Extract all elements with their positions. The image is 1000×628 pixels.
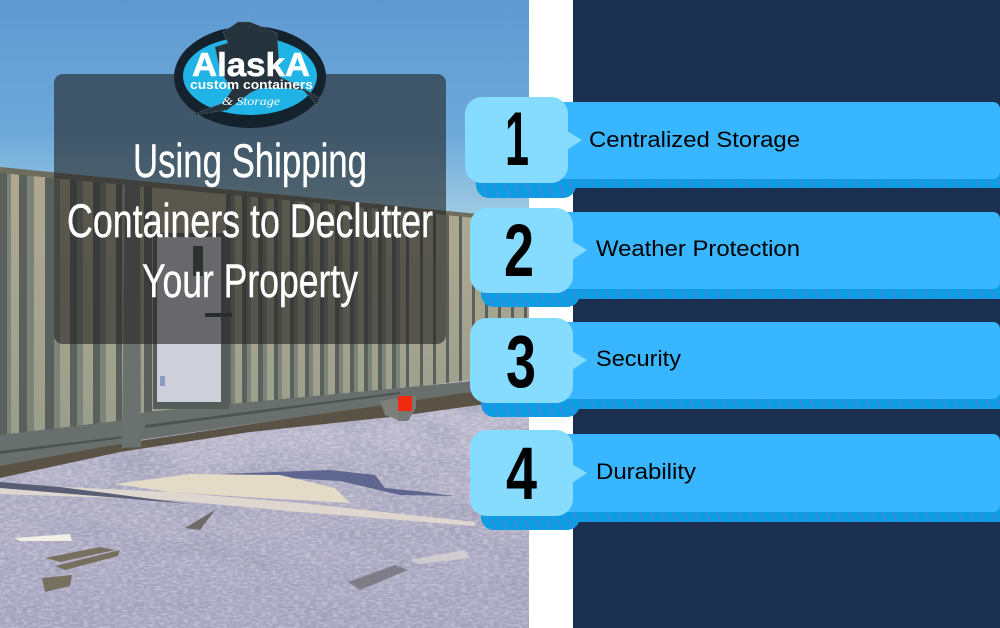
item 2: Weather Protection: 2 — [504, 209, 534, 292]
red box — [398, 396, 412, 411]
logo: Alaska Custom Containers: custom containers — [190, 78, 313, 92]
container corner post — [122, 180, 141, 448]
title: Containers to Declutter — [67, 194, 433, 247]
item 4: Durability: Durability — [596, 459, 696, 484]
item 3: Security: 3 — [506, 320, 536, 403]
item 4: Durability — [470, 430, 1000, 530]
item 4: Durability: 4 — [506, 432, 537, 515]
item 1: Centralized Storage — [465, 97, 1000, 198]
title: Using Shipping — [133, 134, 367, 187]
logo: Alaska Custom Containers — [174, 22, 326, 128]
item 2: Weather Protection: Weather Protection — [596, 236, 800, 261]
logo: Alaska Custom Containers: & Storage — [222, 94, 281, 108]
item 1: Centralized Storage: Centralized Storage — [589, 127, 800, 152]
item 3: Security — [470, 318, 1000, 417]
photo: shipping container on snow — [0, 0, 529, 628]
container bottom rail — [0, 381, 472, 466]
white divider strip — [529, 0, 573, 628]
snow drifts and tracks — [0, 470, 475, 592]
title — [67, 134, 433, 307]
logo: Alaska Custom Containers: AlaskA — [192, 46, 310, 83]
item 2: Weather Protection — [470, 208, 1000, 307]
translucent title panel — [54, 74, 446, 344]
item 3: Security: Security — [596, 346, 681, 371]
title: Your Property — [142, 254, 358, 307]
item 1: Centralized Storage: 1 — [505, 97, 529, 182]
door — [153, 233, 232, 409]
